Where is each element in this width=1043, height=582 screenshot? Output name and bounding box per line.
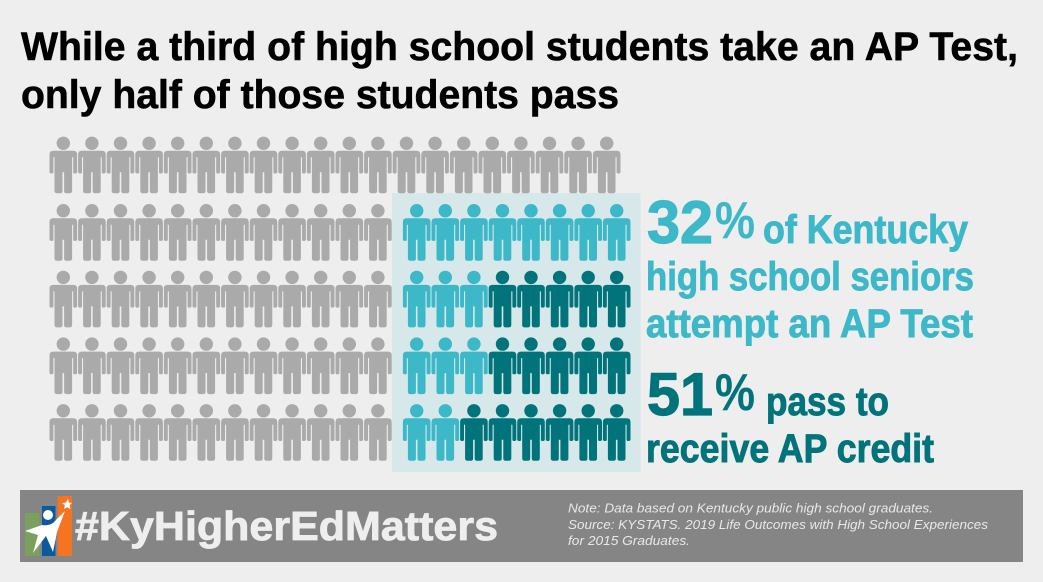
title: only half of those students pass <box>21 73 619 117</box>
title: While a third of high school students take an AP Test, <box>21 25 1018 69</box>
callout: 32 percent attempt an AP test <box>646 189 974 346</box>
footer band <box>20 490 1023 562</box>
callout: 51 percent pass: 51 <box>647 361 713 428</box>
panel: highlighted test takers background <box>392 193 640 472</box>
pictogram: light teal students who attempt a test <box>403 204 630 461</box>
source note <box>568 502 988 548</box>
icon: logo with bars and star figure <box>25 496 72 556</box>
title <box>21 25 1018 117</box>
source note: Note: Data based on Kentucky public high school graduates. <box>568 502 933 516</box>
callout: 51 percent pass: pass to <box>766 380 889 424</box>
hashtag: #KyHigherEdMatters <box>75 503 498 549</box>
callout: 32 percent attempt an AP test: % <box>715 192 755 250</box>
callout: 32 percent attempt an AP test: attempt an AP Test <box>646 302 973 346</box>
callout: 51 percent pass <box>646 361 934 471</box>
source note: Source: KYSTATS. 2019 Life Outcomes with High School Experiences <box>568 518 988 532</box>
callout: 32 percent attempt an AP test: high school seniors <box>646 255 974 299</box>
pictogram: dark teal students who pass <box>460 271 630 461</box>
callout: 51 percent pass: receive AP credit <box>646 427 934 471</box>
callout: 51 percent pass: % <box>715 364 755 422</box>
callout: 32 percent attempt an AP test: of Kentucky <box>763 208 969 252</box>
callout: 32 percent attempt an AP test: 32 <box>647 189 713 256</box>
source note: for 2015 Graduates. <box>568 534 690 548</box>
pictogram: gray students not taking a test <box>50 137 620 461</box>
